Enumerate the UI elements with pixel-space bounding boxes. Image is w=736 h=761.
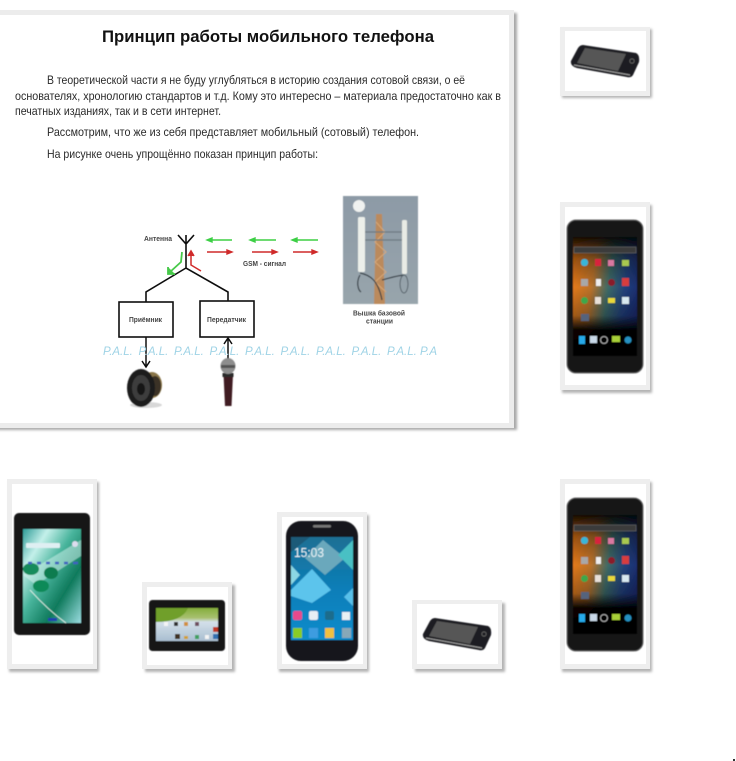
label: base station tower (353, 308, 405, 326)
arrow: receiver to speaker (142, 337, 150, 367)
watermark: P.A (420, 346, 437, 358)
box: transmitter: Передатчик (207, 315, 246, 324)
label: GSM signal: GSM - сигнал (243, 259, 286, 268)
label: base station tower: Вышка базовой (353, 308, 405, 318)
card: smartphone bottom right (560, 479, 652, 672)
text block: introduction: На рисунке очень упрощённо показан принцип работы: (47, 147, 318, 161)
text block: introduction: основателях, хронологию стандартов и т.д. Кому это интересно – материала предостаточно как в (15, 89, 501, 103)
text block: introduction (15, 73, 501, 161)
watermark: P.A.L. (174, 346, 204, 358)
diagram: mobile phone operation (103, 196, 437, 408)
label: base station tower: станции (366, 316, 393, 326)
heading: Принцип работы мобильного телефона (102, 27, 435, 46)
arrow: transmitted signal from transmitter (188, 251, 201, 271)
arrow: microphone to transmitter (224, 338, 232, 360)
icon: smartphone (571, 45, 639, 77)
watermark: P.A.L. (280, 346, 310, 358)
watermark: P.A.L. (245, 346, 275, 358)
icon: microphone (220, 358, 236, 406)
card: landscape smartphone bottom (412, 600, 505, 672)
card: Alcatel smartphone (277, 512, 369, 672)
icon: android phone (567, 220, 643, 373)
box: transmitter (200, 301, 254, 337)
watermark: P.A.L. (210, 346, 239, 358)
watermark: P.A.L. (387, 346, 417, 358)
text block: introduction: В теоретической части я не буду углубляться в историю создания сотовой связи, о её (47, 73, 465, 87)
arrows: outgoing red signal (207, 250, 317, 254)
watermark: P.A.L. (352, 346, 381, 358)
watermark: P.A.L. (103, 346, 133, 358)
card: smartphone right (560, 202, 652, 393)
corner mark (733, 759, 735, 761)
watermark: P.A.L. (316, 346, 346, 358)
box: receiver: Приёмник (129, 315, 162, 324)
label: antenna: Антенна (144, 234, 173, 243)
watermark (103, 346, 437, 358)
panel: principle of operation slide (0, 10, 517, 430)
card: landscape smartphone top right (560, 27, 652, 98)
icon: smartphone (423, 618, 491, 650)
watermark: P.A.L. (138, 346, 168, 358)
icon: smartphone with tiled screen (286, 521, 358, 661)
icon: tablet with water drops (14, 513, 90, 635)
card: landscape tablet (142, 582, 235, 672)
arrow: received signal to receiver (168, 252, 182, 274)
arrows: incoming green signal (207, 238, 318, 242)
box: receiver (119, 302, 173, 337)
text block: introduction: печатных изданиях, так и в сети интернет. (15, 104, 221, 118)
icon: android phone (567, 498, 643, 651)
label: clock: 15:03 (294, 545, 324, 560)
text block: introduction: Рассмотрим, что же из себя представляет мобильный (сотовый) телефон. (47, 125, 419, 139)
photo: base station tower (343, 196, 418, 304)
icon: antenna and feed lines (146, 235, 228, 302)
icon: speaker (127, 369, 162, 408)
icon: small tablet (149, 600, 225, 651)
card: portrait tablet (7, 479, 99, 672)
